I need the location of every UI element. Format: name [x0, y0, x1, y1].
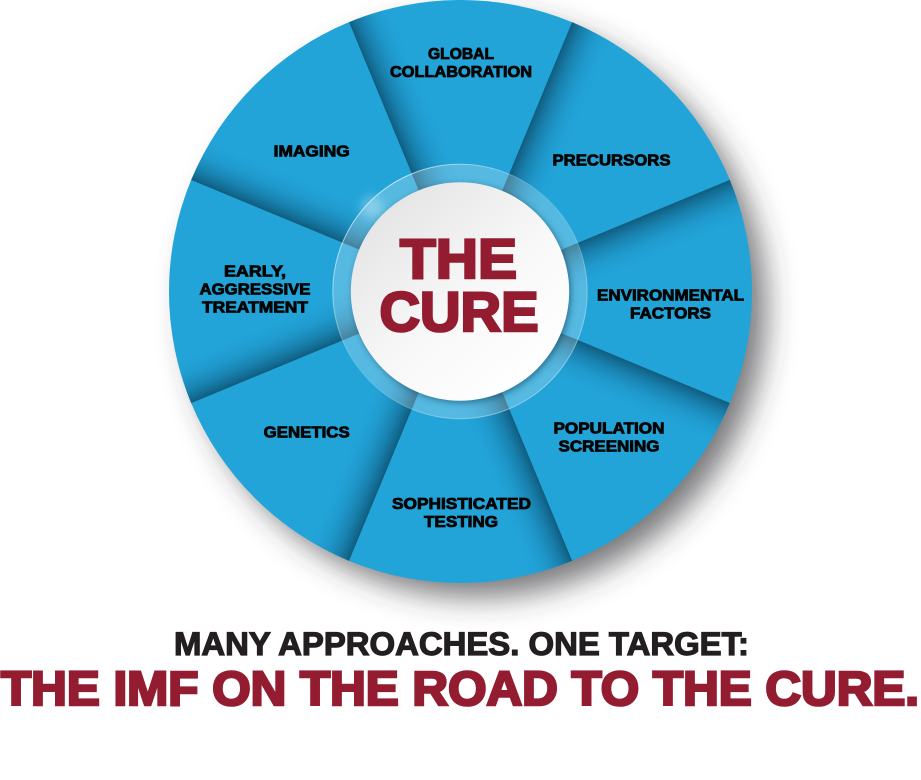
panel: sophisticated testing [349, 292, 572, 583]
panel: environmental factors: ENVIRONMENTAL [597, 288, 744, 304]
centre title [380, 227, 538, 343]
panel: early aggressive treatment: AGGRESSIVE [200, 282, 311, 299]
wheel drop shadow [188, 19, 766, 597]
centre disc shadow [353, 184, 571, 402]
panel: genetics: GENETICS [264, 424, 350, 441]
panel: early aggressive treatment [169, 180, 460, 403]
panel: population screening: POPULATION [554, 420, 664, 438]
panel: global collaboration [349, 0, 572, 292]
panel: genetics [175, 213, 539, 577]
panel: early aggressive treatment: TREATMENT [202, 300, 308, 317]
panel: imaging: IMAGING [274, 144, 350, 161]
centre title: CURE [380, 280, 538, 343]
panel: global collaboration: COLLABORATION [390, 64, 532, 81]
panel: sophisticated testing: TESTING [424, 514, 498, 531]
panel: precursors [382, 6, 746, 370]
tagline: MANY APPROACHES. ONE TARGET: [174, 626, 749, 662]
panel: sophisticated testing: SOPHISTICATED [392, 496, 531, 513]
headline: THE IMF ON THE ROAD TO THE CURE. [1, 663, 919, 716]
panel: environmental factors [460, 180, 752, 403]
centre title: THE [400, 227, 517, 290]
panel: global collaboration: GLOBAL [428, 46, 494, 63]
panel: population screening [382, 213, 746, 577]
panel: early aggressive treatment: EARLY, [224, 264, 286, 281]
panel: precursors: PRECURSORS [552, 152, 671, 169]
centre disc [351, 182, 569, 401]
panel: environmental factors: FACTORS [630, 306, 711, 322]
panel: population screening: SCREENING [558, 438, 660, 455]
translucent ring around centre [333, 164, 587, 419]
panel: imaging [175, 6, 539, 370]
